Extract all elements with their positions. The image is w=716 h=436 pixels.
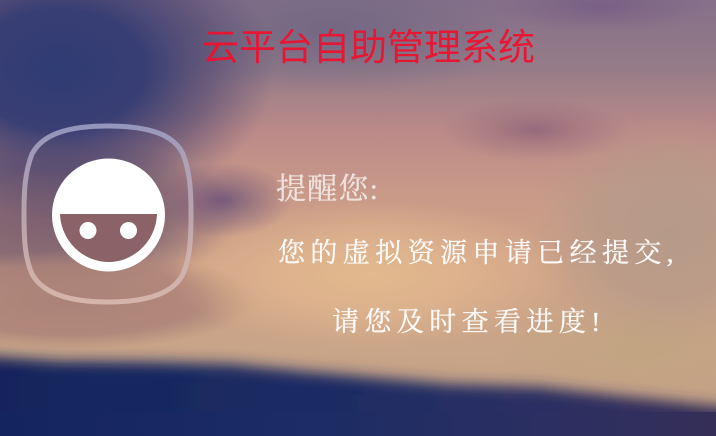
icon: smiling face in rounded frame (22, 124, 194, 304)
frame (24, 126, 191, 302)
text: progress message: 请您及时查看进度! (332, 307, 606, 337)
face (52, 158, 165, 272)
title: 云平台自助管理系统 (202, 27, 535, 68)
text: submission message: 您的虚拟资源申请已经提交, (278, 238, 679, 268)
text: reminder label: 提醒您: (276, 173, 379, 206)
